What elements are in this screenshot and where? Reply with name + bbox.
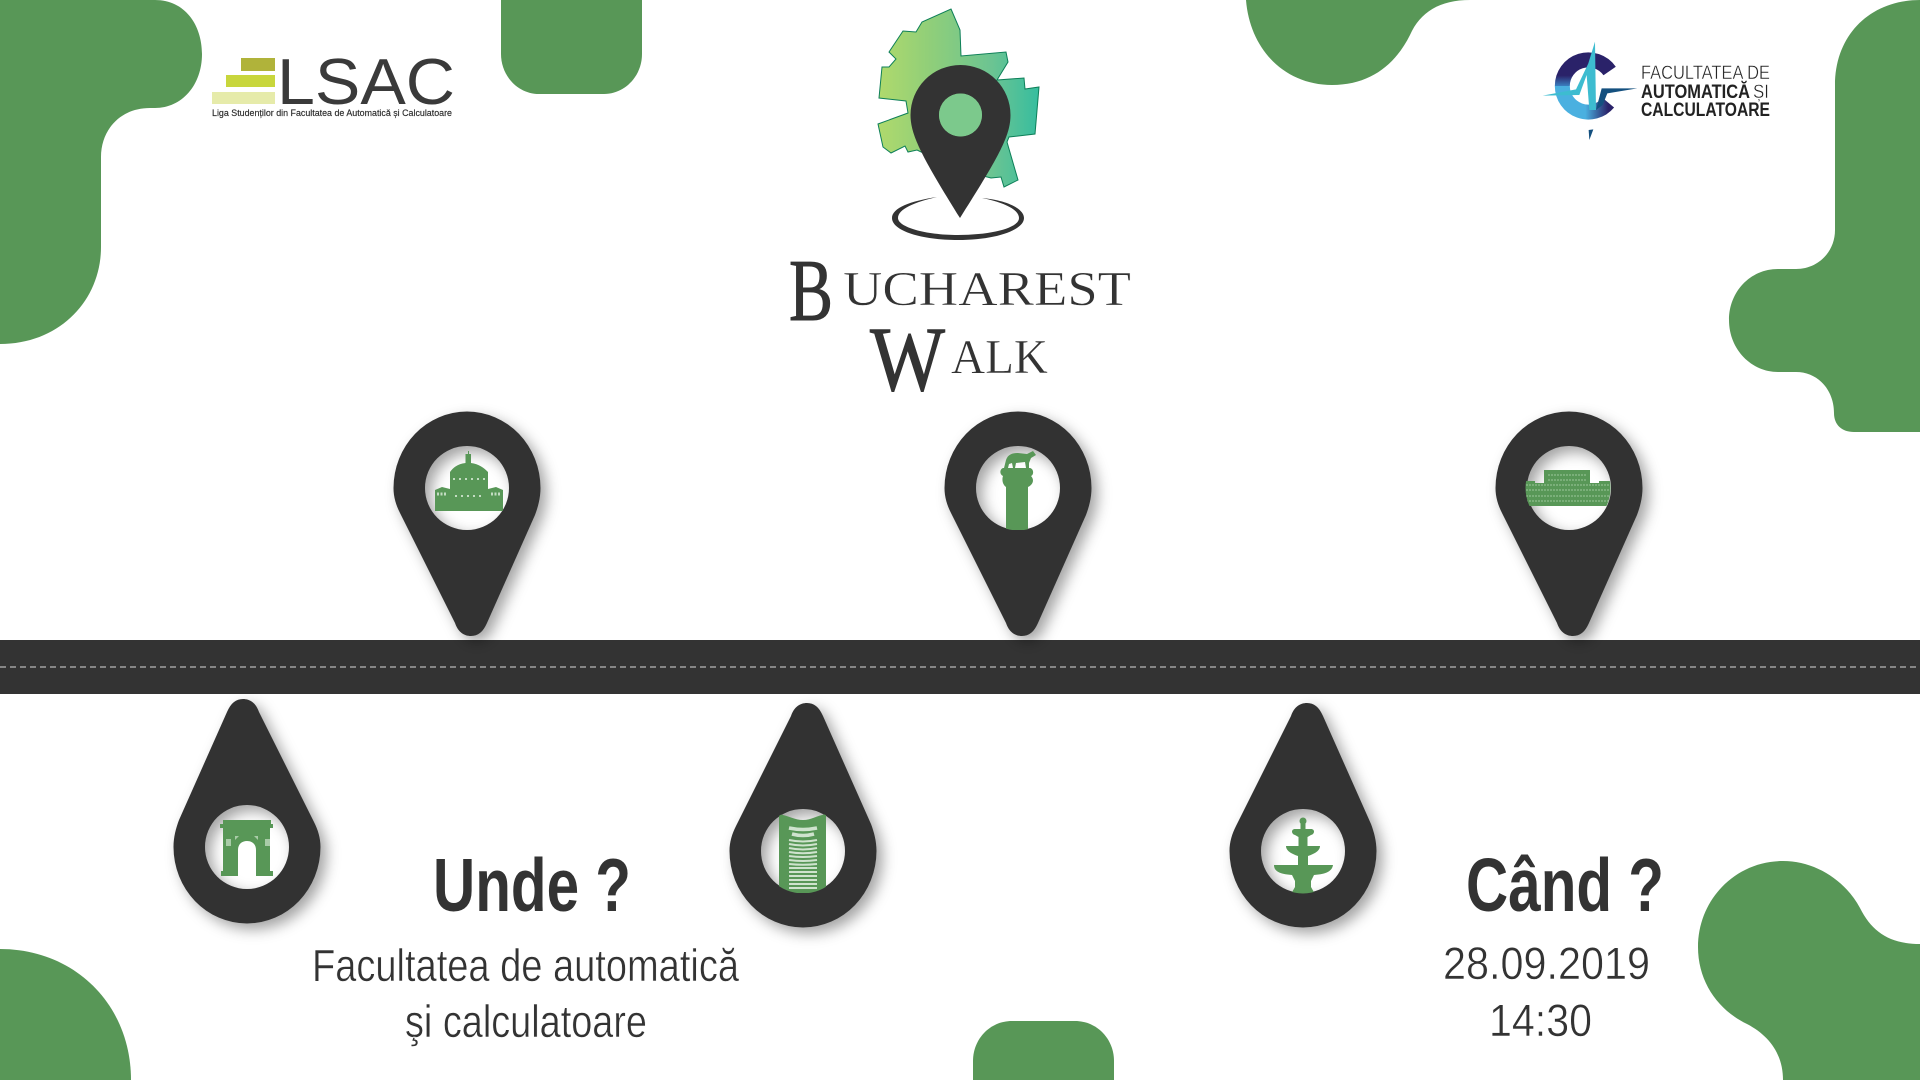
pin: Lupa Capitolina — [944, 412, 1092, 636]
logo tagline: Liga Studenților din Facultatea de Automatică și Calculatoare — [212, 108, 452, 118]
icon: triumphal arch — [220, 820, 273, 876]
map of Bucharest — [878, 9, 1039, 187]
title: Walk: ALK — [951, 329, 1048, 384]
ground ring — [892, 197, 1024, 240]
pin body — [174, 699, 320, 924]
icon: Palace of Parliament — [1525, 470, 1611, 506]
title: Bucharest: UCHAREST — [843, 261, 1131, 316]
text: date and time — [1443, 938, 1650, 1046]
decorative blob: top centre right — [1246, 0, 1470, 85]
logo: Facultatea de Automatică și Calculatoare — [1543, 42, 1770, 140]
pin body — [1496, 412, 1642, 636]
emblem text: FACULTATEA DE — [1641, 63, 1770, 84]
decorative blob: right — [1729, 0, 1920, 432]
heading: Unde: Unde ? — [433, 843, 631, 927]
compass emblem — [1543, 42, 1637, 140]
emblem text: ȘI — [1753, 82, 1769, 103]
pin: Turnul BCR — [730, 703, 876, 928]
road — [0, 640, 1920, 694]
pin: Arcul de Triumf — [174, 699, 320, 924]
text: location — [312, 940, 740, 1047]
emblem text: AUTOMATICĂ — [1641, 81, 1750, 103]
emblem text: CALCULATOARE — [1641, 100, 1770, 121]
pin body — [944, 412, 1092, 636]
icon: fountain — [1274, 818, 1333, 894]
pin body — [394, 412, 540, 636]
icon: Athenaeum — [435, 451, 503, 511]
title: Walk: W — [870, 308, 945, 410]
logo wordmark: LSAC — [277, 45, 455, 118]
title: Bucharest: B — [789, 243, 833, 340]
logo bars — [212, 58, 275, 104]
icon: tower — [779, 814, 826, 893]
text: date and time: 14:30 — [1489, 995, 1592, 1046]
pin centre — [939, 94, 982, 136]
text: date and time: 28.09.2019 — [1443, 938, 1650, 989]
title: Walk — [870, 308, 1048, 410]
decorative blob: bottom right — [1698, 861, 1920, 1080]
pin body — [730, 703, 876, 928]
logo: Bucharest Walk — [789, 9, 1131, 410]
text: location: Facultatea de automatică — [312, 940, 740, 991]
pin: Fântâna — [1230, 703, 1376, 928]
title: Bucharest — [789, 243, 1131, 340]
logo: LSAC — [212, 45, 455, 118]
icon: she-wolf column — [1000, 451, 1036, 530]
location pin — [910, 65, 1010, 218]
decorative tab: bottom — [973, 1021, 1114, 1080]
pin body — [1230, 703, 1376, 928]
pin: Ateneul Român — [394, 412, 540, 636]
text: location: şi calculatoare — [405, 996, 647, 1047]
decorative blob: bottom left — [0, 949, 131, 1080]
emblem text — [1641, 63, 1770, 121]
decorative tab: top — [501, 0, 642, 94]
decorative blob: top left — [0, 0, 202, 344]
heading: Când: Când ? — [1466, 843, 1664, 927]
pin: Casa Poporului — [1496, 412, 1642, 636]
